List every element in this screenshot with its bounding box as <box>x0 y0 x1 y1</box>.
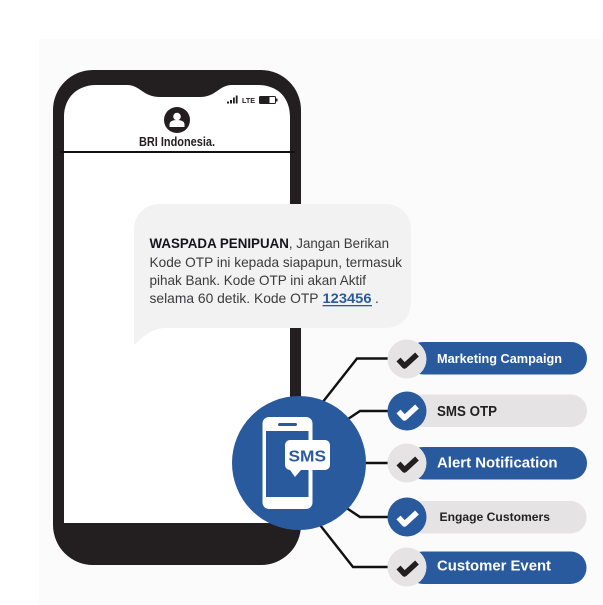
SMS label: SMS <box>288 448 326 466</box>
connector lines <box>320 358 390 567</box>
message bubble <box>134 204 411 345</box>
item: Customer Event <box>388 548 586 586</box>
SMS badge <box>232 396 366 530</box>
smartphone <box>53 70 301 565</box>
signal bars <box>227 96 238 104</box>
item: Engage Customers: Engage Customers <box>440 510 550 524</box>
warning message text: WASPADA PENIPUAN, Jangan Berikan <box>150 236 389 251</box>
phone body <box>53 70 301 565</box>
item: Marketing Campaign: Marketing Campaign <box>437 351 562 366</box>
phone screen <box>64 85 290 523</box>
warning message text: . <box>375 291 379 306</box>
contact name: BRI Indonesia. <box>139 135 215 149</box>
warning message text <box>150 236 402 306</box>
network label: LTE <box>242 96 255 105</box>
header divider <box>60 151 295 153</box>
battery <box>260 96 278 104</box>
item: Alert Notification <box>388 444 587 482</box>
item: Marketing Campaign <box>388 340 587 378</box>
warning message text: pihak Bank. Kode OTP ini akan Aktif <box>150 273 366 288</box>
contact avatar <box>164 107 190 133</box>
badge circle <box>232 396 366 530</box>
warning message text: 123456 <box>322 291 372 306</box>
item: SMS OTP <box>388 392 587 430</box>
item: SMS OTP: SMS OTP <box>437 404 497 420</box>
item: Customer Event: Customer Event <box>437 558 551 574</box>
bubble shape <box>134 204 411 345</box>
warning message text: Kode OTP ini kepada siapapun, termasuk <box>150 255 402 270</box>
item: Engage Customers <box>388 498 586 536</box>
item: Alert Notification: Alert Notification <box>437 454 558 472</box>
warning message text: selama 60 detik. Kode OTP <box>150 291 318 306</box>
status bar <box>227 96 278 105</box>
